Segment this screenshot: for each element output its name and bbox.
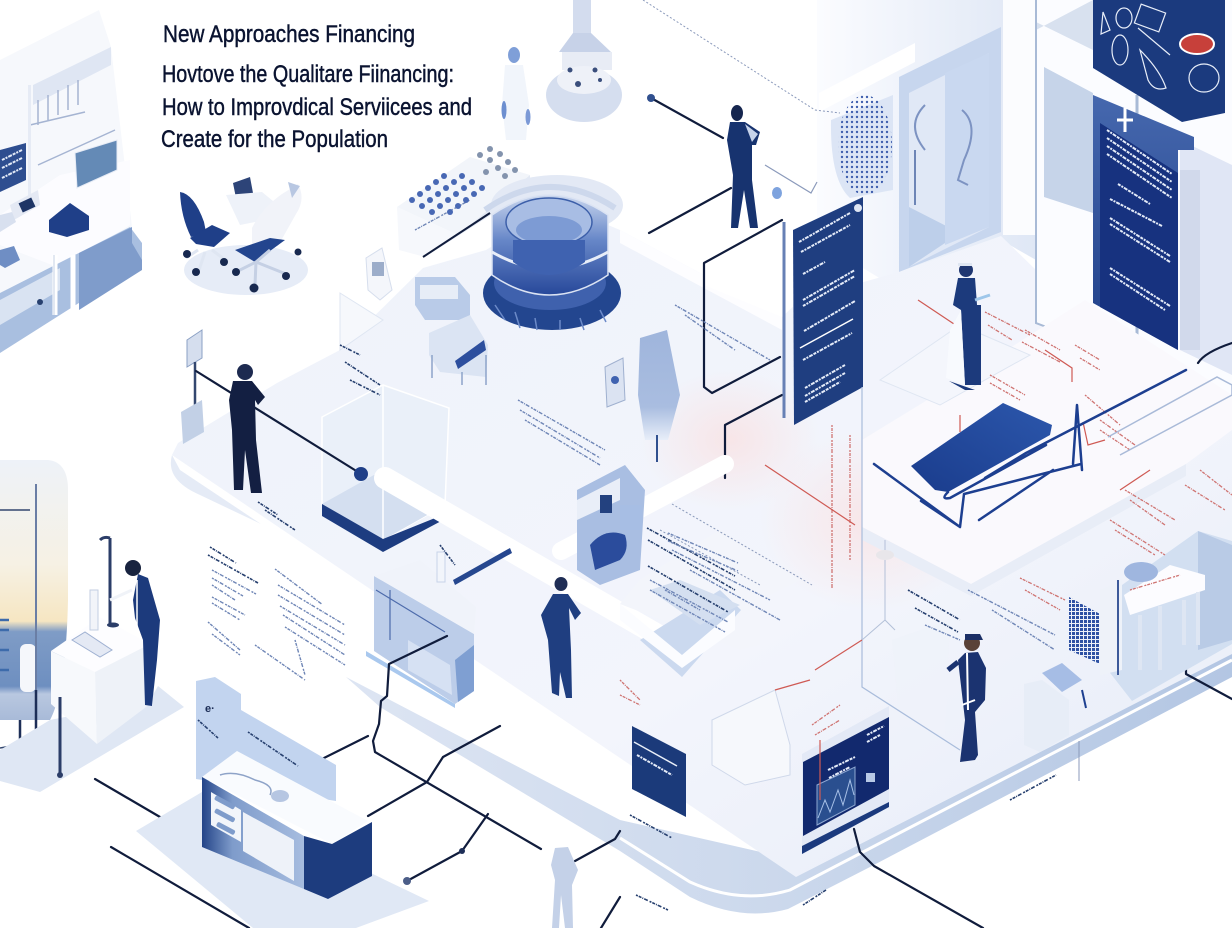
pipes: white conduits <box>385 464 725 648</box>
panel: IV stand and hanging coat <box>605 330 680 462</box>
panel: left tank <box>0 460 68 764</box>
panel: top ceiling device <box>546 0 622 122</box>
counter label: e· <box>205 703 215 715</box>
lower light band <box>620 660 1232 896</box>
panel: main floor <box>171 205 1232 913</box>
door <box>899 27 1001 272</box>
icon: red organ <box>1180 34 1214 54</box>
icon: monitor <box>233 177 253 198</box>
panel: central analyser cabinet <box>366 548 512 708</box>
lamp stand <box>862 540 895 640</box>
vessel body <box>492 195 608 295</box>
panel: vial tray <box>397 146 530 257</box>
callout line: frame bracket <box>647 94 817 478</box>
figure: nurse <box>946 263 990 390</box>
floor rim <box>346 640 1232 913</box>
panel: monitor with line chart <box>802 706 889 854</box>
desk white <box>0 160 130 268</box>
chair dark <box>180 192 230 276</box>
title: How to Improvdical Serviicees and <box>162 94 472 121</box>
printer <box>10 190 40 220</box>
notes left column <box>208 547 258 655</box>
dotted panel <box>1069 597 1100 664</box>
panel: glass room and right wall <box>1036 0 1232 395</box>
panel: lower navy information sign <box>1093 95 1194 350</box>
figure: person with notes at right <box>948 634 986 762</box>
icon: stethoscope <box>220 773 271 795</box>
figure: pale person at bottom <box>551 847 578 928</box>
title: Hovtove the Qualitare Fiinancing: <box>162 61 454 88</box>
panel: back wall and doorway <box>817 0 1036 290</box>
panel: left workstation <box>0 10 142 353</box>
panel: annotations wall text <box>208 305 770 680</box>
callout line: dotted diagonal <box>643 0 840 113</box>
sign text lines <box>799 213 855 402</box>
icon: cross <box>1117 108 1133 132</box>
panel: central glass cube <box>322 385 449 552</box>
panel: blue equipment cluster <box>577 465 645 585</box>
panel: office chairs <box>180 177 308 295</box>
figure: person at left platform <box>229 364 265 493</box>
panel: central reactor vessel <box>483 175 623 330</box>
title: New Approaches Financing <box>163 21 415 48</box>
notes text <box>647 528 780 632</box>
panel: dark square panel <box>632 726 686 817</box>
pale side cart <box>712 690 790 785</box>
panel: lab bench with analyser <box>340 248 488 385</box>
figure: pale technician <box>502 47 530 140</box>
panel: reception counter <box>136 677 429 928</box>
white wall strip <box>819 43 915 112</box>
icon: organs <box>1101 4 1219 92</box>
red annotation lines <box>765 300 1232 590</box>
figure: lab technician <box>110 560 160 706</box>
panel: right equipment stations <box>620 387 1232 910</box>
monitor text <box>828 726 884 778</box>
pink glow <box>640 370 820 510</box>
panel: upper navy sign with organ icons <box>1093 0 1225 122</box>
chart <box>817 767 855 825</box>
chair floor pad <box>184 245 308 295</box>
station table <box>1124 565 1205 615</box>
monitor right <box>75 140 117 188</box>
white column <box>1003 0 1036 235</box>
chair white <box>232 182 302 292</box>
panel: display table with notes <box>620 504 812 677</box>
sign text lines <box>1107 130 1172 310</box>
panel: left lab table pad <box>0 537 184 792</box>
icon: badge <box>854 204 862 212</box>
upper white ledge <box>620 230 782 330</box>
annotations <box>620 520 1180 910</box>
shelf unit <box>33 47 111 105</box>
desk legs <box>55 255 73 318</box>
icon: terminal connector dot <box>354 467 368 481</box>
tablet <box>0 246 20 268</box>
pale shelving <box>892 620 950 735</box>
panel: fingerprint wall graphic <box>831 95 972 205</box>
title: Create for the Population <box>161 126 388 153</box>
glass partition <box>862 387 960 750</box>
callout lines: lower network <box>95 587 1232 928</box>
icon: small wall terminal <box>181 330 358 472</box>
bed frame <box>874 343 1232 527</box>
panel: nurse platform and patient bed <box>765 300 1232 596</box>
vessel base skirt <box>483 256 621 330</box>
keypad machine <box>1024 680 1069 752</box>
notes right column <box>255 569 345 680</box>
title <box>161 21 472 153</box>
vials <box>409 173 485 215</box>
monitor left <box>0 143 26 192</box>
panel: navy finance sign <box>793 197 863 425</box>
figure: person with tablet <box>727 105 760 228</box>
figure: person at centre floor <box>541 577 581 698</box>
